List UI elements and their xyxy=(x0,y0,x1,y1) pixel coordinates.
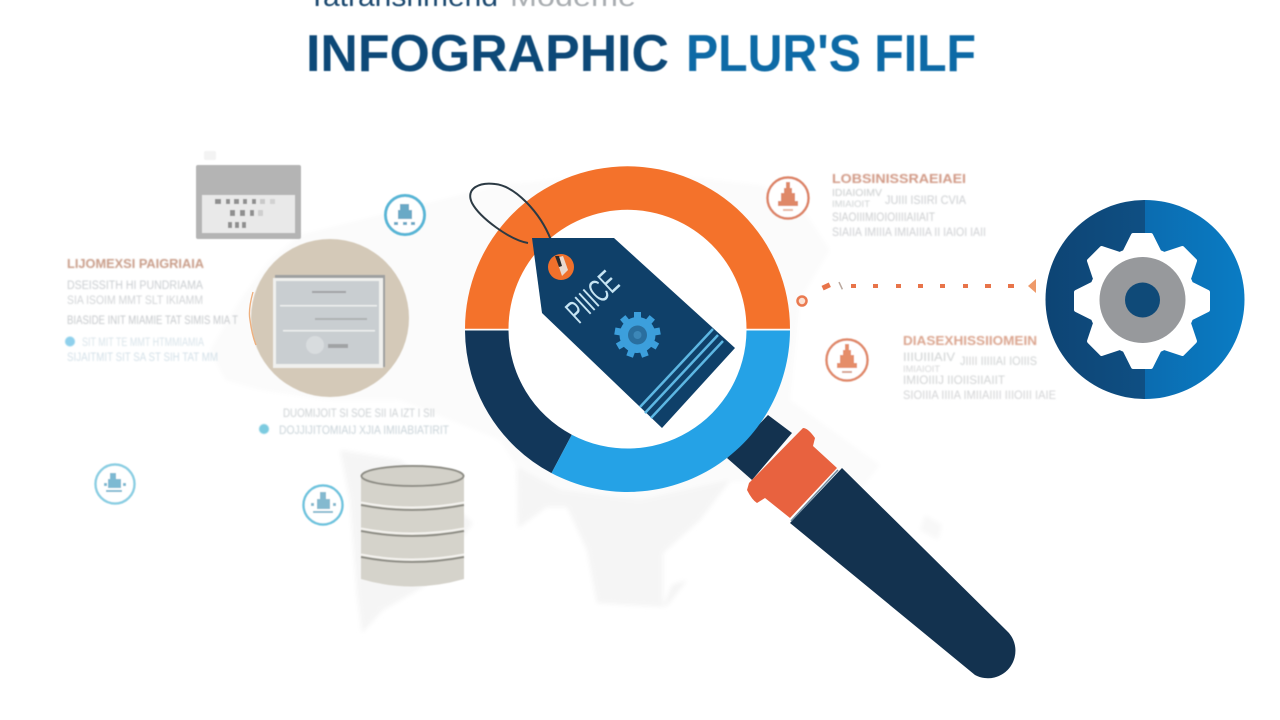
tag stripes xyxy=(640,329,723,418)
text block: right top: SIAIIA IMIIIA IMIAIIIA II IAIOI IAII xyxy=(832,227,986,239)
title: INFOGRAPHIC xyxy=(306,25,669,83)
text block: left xyxy=(65,256,238,364)
text block: right top: JUIII ISIIRI CVIA xyxy=(885,195,966,207)
text block: right top: LOBSINISSRAEIAEI xyxy=(832,171,966,186)
text block: left: LIJOMEXSI PAIGRIAIA xyxy=(67,256,205,271)
text block: right top xyxy=(832,171,986,239)
title xyxy=(306,25,976,83)
magnifying glass handle xyxy=(727,415,1015,678)
tag label: PIIICE xyxy=(558,263,626,330)
text block: right bottom: IIIUIIIAIV xyxy=(903,352,955,364)
text block: left: BIASIDE INIT MIAMIE TAT SIMIS MIA T xyxy=(67,315,238,327)
text block: right bottom: JIIII IIIIIAI IOIIIS xyxy=(960,356,1037,368)
text block: left: SIJAITMIT SIT SA ST SIH TAT MM xyxy=(67,352,218,364)
text block: lower centre: DUOMIJOIT SI SOE SII IA IZT I SII xyxy=(283,408,435,420)
text block: right bottom xyxy=(903,333,1056,402)
text block: left: SIA ISOIM MMT SLT IKIAMM xyxy=(67,295,203,307)
text block: right bottom: DIASEXHISSIIOMEIN xyxy=(903,333,1037,348)
icon: large gear disc xyxy=(1046,200,1244,399)
cropped subtitle xyxy=(308,0,636,13)
text block: right top: IDIAIOIMV xyxy=(832,188,882,199)
text block: right top: SIAOIIIMIOIOIIIIAIIAIT xyxy=(832,212,935,224)
magnifying glass ring xyxy=(465,166,790,492)
text block: left: SIT MIT TE MMT HTMMIAMIA xyxy=(82,337,204,349)
text block: left: DSEISSITH HI PUNDRIAMA xyxy=(67,280,203,292)
icon: orange badge bottom xyxy=(826,340,868,380)
title: PLUR'S FILF xyxy=(686,25,976,83)
text block: lower centre xyxy=(259,408,449,437)
price tag xyxy=(470,184,735,428)
text block: right bottom: SIOIIIA IIIIA IMIIAIIII IIIOIII IAIE xyxy=(903,390,1056,402)
icon: database stack xyxy=(361,466,464,586)
tag gear icon xyxy=(614,312,661,358)
icon: blue badge top xyxy=(386,196,424,234)
icon: orange badge top xyxy=(768,178,808,218)
text block: right bottom: IMIOIIIJ IIOIISIIAIIT xyxy=(903,375,1005,387)
document circle xyxy=(249,239,409,397)
icon: blue badge left xyxy=(96,464,134,504)
dotted arrow xyxy=(798,279,1036,306)
icon: blue badge bottom xyxy=(304,486,342,524)
text block: right top: IMIAIOIT xyxy=(832,199,871,209)
world map background xyxy=(210,172,942,633)
tag eyelet xyxy=(548,254,574,280)
text block: lower centre: DOJJIJITOMIAIJ XJIA IMIIABIATIRIT xyxy=(279,425,449,437)
text block: right bottom: IMIAIOIT xyxy=(903,364,941,374)
icon: server panel xyxy=(196,151,301,239)
